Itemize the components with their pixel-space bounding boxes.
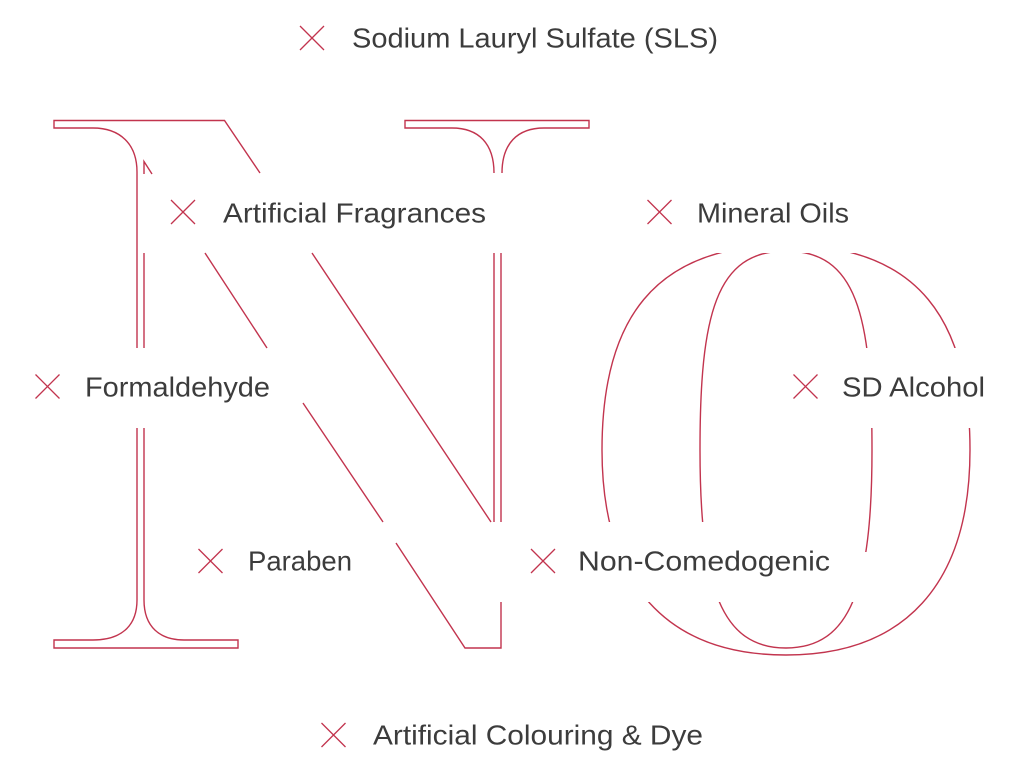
item: Paraben: Paraben [248,546,352,576]
item: Mineral Oils: Mineral Oils [697,198,849,228]
item: Non-Comedogenic: Non-Comedogenic [578,546,830,576]
item: SD Alcohol: SD Alcohol [842,372,985,402]
item: Formaldehyde: Formaldehyde [85,372,270,402]
item: Artificial Fragrances: Artificial Fragrances [223,198,486,228]
item: Artificial Colouring & Dye: Artificial Colouring & Dye [373,720,703,750]
letter N outline [54,120,589,648]
item: Paraben [198,546,352,576]
letter O outline [520,235,980,655]
item: Sodium Lauryl Sulfate (SLS): Sodium Lauryl Sulfate (SLS) [352,22,718,54]
